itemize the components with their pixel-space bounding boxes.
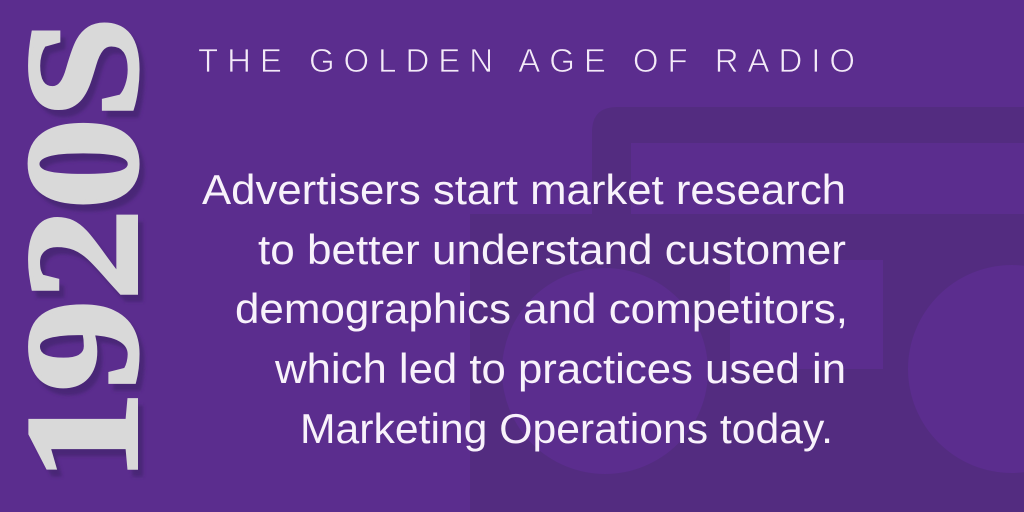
body text xyxy=(202,166,848,452)
body text: Advertisers start market research xyxy=(202,166,846,213)
icon: radio silhouette xyxy=(470,107,1024,512)
subtitle: THE GOLDEN AGE OF RADIO xyxy=(198,42,855,79)
body text: to better understand customer xyxy=(258,226,846,273)
body text: demographics and competitors, xyxy=(235,285,848,332)
body text: which led to practices used in xyxy=(274,345,846,392)
year heading: 1920S: 1920S xyxy=(0,24,176,489)
body text: Marketing Operations today. xyxy=(300,405,833,452)
